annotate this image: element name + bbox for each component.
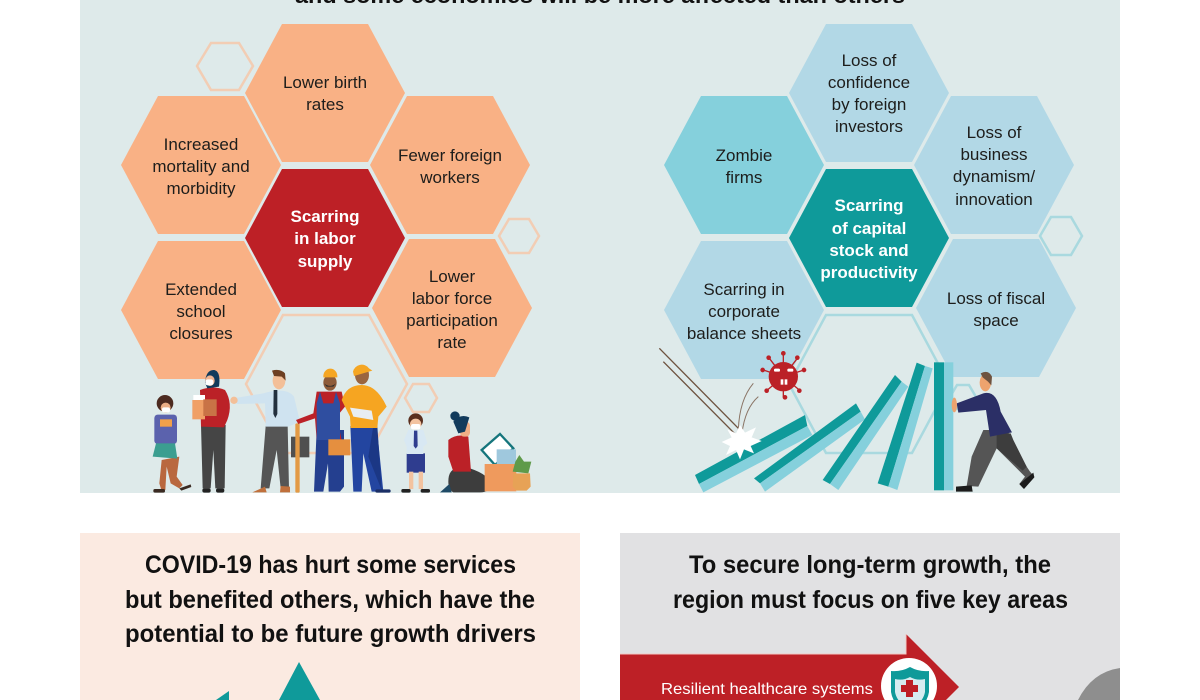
- hexagon: lower birth rates: [245, 24, 405, 162]
- heading: services: [125, 551, 536, 648]
- hexagon: scarring of capital stock: of capital: [832, 219, 906, 238]
- icon: domino 2: [754, 403, 865, 492]
- icon: domino 1: [695, 415, 812, 492]
- figure: schoolgirl: [153, 395, 191, 493]
- figure: man in shirt and tie: [230, 370, 309, 493]
- hexagon: loss of fiscal space: space: [973, 311, 1019, 330]
- hexagon: increased mortality: Increased: [164, 135, 238, 154]
- hexagon: extended school closures: Extended: [165, 280, 237, 299]
- hexagon: zombie firms: firms: [726, 168, 762, 187]
- icon: domino 4: [878, 363, 933, 490]
- panel: key areas: [620, 533, 1120, 700]
- chart: growth triangles: [216, 662, 320, 700]
- hexagon: increased mortality: mortality and: [152, 157, 250, 176]
- hexagon: loss of dynamism: business: [960, 145, 1028, 164]
- hexagon: loss of confidence: Loss of: [842, 51, 897, 70]
- hexagon: loss of fiscal space: Loss of fiscal: [947, 289, 1045, 308]
- heading: services: potential to be future growth drivers: [125, 620, 536, 648]
- hexagon: scarring of capital stock: [789, 169, 949, 307]
- panel: services: [80, 533, 580, 700]
- icon: grey figure silhouette: [1078, 668, 1120, 700]
- hexagon: loss of confidence: investors: [835, 117, 903, 136]
- icon: coronavirus: [761, 352, 806, 399]
- hexagon cluster: labor supply: [121, 24, 539, 453]
- hexagon: scarring in labor supply: Scarring: [291, 207, 359, 226]
- hexagon: loss of fiscal space: [916, 239, 1076, 377]
- hexagon: increased mortality: morbidity: [167, 179, 236, 198]
- hexagon: scarring in labor supply: [245, 169, 405, 307]
- hexagon: loss of confidence: [789, 24, 949, 162]
- hexagon: increased mortality: [121, 96, 281, 234]
- illustration: workers group: [153, 365, 531, 493]
- hexagon: fewer foreign workers: [370, 96, 530, 234]
- figure: construction worker in yellow: [342, 365, 391, 493]
- icon: domino 3: [823, 375, 908, 490]
- arrow: resilient healthcare systems: [620, 634, 959, 700]
- hexagon: fewer foreign workers: workers: [419, 168, 480, 187]
- hexagon: extended school closures: [121, 241, 281, 379]
- hexagon: lower birth rates: rates: [306, 95, 344, 114]
- hexagon: scarring in labor supply: supply: [298, 252, 353, 271]
- hexagon: zombie firms: [664, 96, 824, 234]
- arrow: resilient healthcare systems: Resilient healthcare systems: [661, 681, 873, 698]
- hexagon: lower participation: rate: [437, 333, 467, 352]
- heading: services: COVID-19 has hurt some services: [145, 551, 516, 579]
- hexagon: lower birth rates: Lower birth: [283, 73, 367, 92]
- hexagon: corporate balance sheets: corporate: [708, 302, 780, 321]
- hexagon: fewer foreign workers: Fewer foreign: [398, 146, 502, 165]
- hexagon: corporate balance sheets: [664, 241, 824, 379]
- hexagon: extended school closures: school: [176, 302, 226, 321]
- hexagon: scarring of capital stock: stock and: [829, 241, 909, 260]
- hexagon: scarring of capital stock: productivity: [820, 263, 918, 282]
- hexagon: scarring in labor supply: in labor: [294, 229, 356, 248]
- figure: woman with box: [192, 370, 230, 493]
- hexagon: scarring of capital stock: Scarring: [835, 196, 903, 215]
- icon: medical shield: [881, 658, 937, 700]
- hexagon: loss of dynamism: dynamism/: [953, 167, 1035, 186]
- hexagon: zombie firms: Zombie: [716, 146, 772, 165]
- panel: long-term scarring: [80, 0, 1120, 493]
- hexagon: corporate balance sheets: balance sheets: [687, 324, 801, 343]
- figure: seated woman with belongings: [440, 411, 531, 492]
- heading: key areas: To secure long-term growth, the: [689, 551, 1051, 579]
- hexagon: loss of confidence: by foreign: [832, 95, 906, 114]
- figure: construction worker with overalls: [296, 369, 350, 492]
- hexagon: corporate balance sheets: Scarring in: [703, 280, 785, 299]
- hexagon: lower participation: Lower: [429, 267, 475, 286]
- hexagon cluster: capital stock: [664, 24, 1082, 453]
- icon: impact lines and burst: [659, 348, 762, 459]
- illustration: falling dominoes: [659, 348, 1034, 492]
- figure: man pushing domino: [952, 372, 1034, 492]
- figure: schoolboy: [401, 413, 430, 493]
- heading: key areas: region must focus on five key areas: [673, 586, 1068, 614]
- hexagon: loss of dynamism: [914, 96, 1074, 234]
- hexagon: lower participation: participation: [406, 311, 498, 330]
- hexagon: loss of dynamism: Loss of: [967, 123, 1022, 142]
- hexagon: loss of confidence: confidence: [828, 73, 910, 92]
- icon: domino 5: [934, 362, 953, 490]
- heading: key areas: [673, 551, 1068, 614]
- heading: services: but benefited others, which have the: [125, 586, 535, 614]
- hexagon: extended school closures: closures: [169, 324, 233, 343]
- hexagon: lower participation: labor force: [412, 289, 492, 308]
- hexagon: lower participation: [372, 239, 532, 377]
- hexagon: loss of dynamism: innovation: [955, 190, 1033, 209]
